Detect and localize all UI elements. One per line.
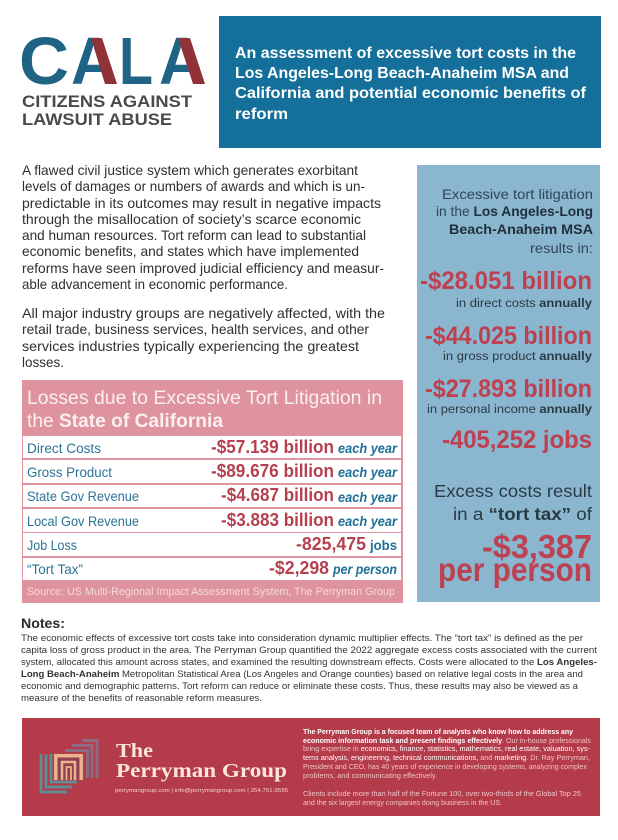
row: gross product [23, 460, 401, 483]
intro text block: reforms have seen improved judicial efficiency and measur- [22, 260, 384, 276]
table heading: the State of California [27, 411, 223, 432]
footer about text: Clients include more than half of the Fortune 100, over two-thirds of the Global Top 25 [303, 791, 581, 798]
footer about text: President and CEO, has 40 years of experience in developing systems, analyzing complex [303, 764, 587, 771]
logo: CALA: L [119, 24, 153, 99]
row: tort tax [23, 558, 401, 580]
stat: direct costs: in direct costs annually [456, 298, 593, 310]
row: tort tax: “Tort Tax” [27, 561, 83, 577]
stat: jobs: -405,252 jobs [442, 426, 592, 454]
panel intro: Excessive tort litigation [442, 186, 593, 202]
row: local gov revenue: -$3.883 billion [221, 510, 334, 530]
footer about text: bring expertise in economics, finance, statistics, mathematics, real estate, valuation, sys- [303, 746, 591, 753]
logo: CALA: A [159, 24, 204, 99]
tort tax callout: per person [438, 551, 592, 588]
intro text block: through the misallocation of society’s scarce economic [22, 211, 361, 227]
intro text block: levels of damages or numbers of awards and which is un- [22, 178, 365, 194]
title banner: An assessment of excessive tort costs in the [235, 45, 576, 62]
row: job loss: -825,475 [296, 534, 366, 554]
logo: CALA: CITIZENS AGAINST [22, 93, 192, 111]
tort tax callout: Excess costs result [434, 481, 592, 501]
panel: Perryman Group footer [22, 718, 600, 816]
footer about text [303, 729, 592, 807]
notes: The economic effects of excessive tort costs take into consideration dynamic multiplier effects. The “tort tax” is defined as the per [21, 633, 583, 643]
stat: direct costs [420, 267, 593, 310]
intro text block: losses. [22, 354, 64, 370]
logo: CALA [19, 24, 205, 129]
row: job loss: Job Loss [27, 537, 77, 553]
footer contact line: perrymangroup.com | info@perrymangroup.com | 254.751.9595 [115, 788, 288, 794]
row: gross product: -$89.676 billion [211, 461, 334, 481]
row: state gov revenue: -$4.687 billion [221, 485, 334, 505]
stat: personal income [425, 375, 593, 416]
intro text block: economic benefits, and states which have implemented [22, 243, 359, 259]
row: state gov revenue: each year [338, 489, 398, 505]
row: tort tax: -$2,298 [269, 558, 329, 578]
row: gross product: each year [338, 464, 398, 480]
row: local gov revenue: Local Gov Revenue [27, 513, 139, 529]
notes: Notes: [21, 615, 65, 631]
panel: Los Angeles MSA results [417, 165, 600, 602]
tort tax callout: in a “tort tax” of [453, 504, 592, 524]
panel intro: results in: [530, 240, 593, 256]
stat: gross product: -$44.025 billion [425, 322, 592, 350]
stat: gross product [425, 322, 593, 363]
footer about text: and the six largest energy companies doing business in the US. [303, 800, 502, 807]
tort tax callout [434, 481, 592, 588]
row: job loss: jobs [369, 537, 397, 553]
intro text block: predictable in its outcomes may result in negative impacts [22, 195, 381, 211]
tort tax callout: -$3,387 [482, 528, 592, 565]
row: direct costs: -$57.139 billion [211, 437, 334, 457]
row: direct costs: each year [338, 440, 398, 456]
logo: CALA: C [19, 24, 69, 99]
row: local gov revenue [23, 509, 401, 532]
intro text block: retail trade, business services, health services, and other [22, 321, 369, 337]
footer about text: tems analysis, engineering, technical communications, and marketing. Dr. Ray Perryman, [303, 755, 590, 762]
intro text block [22, 162, 385, 370]
title banner: reform [235, 106, 288, 123]
intro text block: able advancement in economic performance. [22, 276, 288, 292]
table heading [27, 388, 382, 432]
logo: CALA: A [71, 24, 116, 99]
notes: system, allocated this amount across states, and examined the resulting downstream effects. Costs were allocated to the Los Angeles- [21, 657, 597, 667]
stat: gross product: in gross product annually [443, 351, 593, 363]
table heading: Losses due to Excessive Tort Litigation in [27, 388, 382, 409]
panel intro: Beach-Anaheim MSA [449, 221, 593, 237]
panel intro: in the Los Angeles-Long [436, 203, 593, 219]
row: state gov revenue [23, 485, 401, 507]
row: tort tax: per person [332, 561, 397, 577]
row: local gov revenue: each year [338, 513, 398, 529]
stat: personal income: -$27.893 billion [425, 375, 592, 403]
notes: capita loss of gross product in the area. The Perryman Group quantified the 2022 aggregate excess costs associated with the current [21, 645, 598, 655]
row: state gov revenue: State Gov Revenue [27, 488, 139, 504]
footer brand name: The [116, 740, 153, 762]
stat: direct costs: -$28.051 billion [420, 267, 592, 295]
footer about text: problems, and communicating effectively. [303, 773, 437, 780]
row: gross product: Gross Product [27, 464, 112, 480]
logo: CALA: LAWSUIT ABUSE [22, 111, 172, 129]
table source: Source: US Multi-Regional Impact Assessment System, The Perryman Group [27, 586, 395, 598]
row: direct costs [23, 436, 401, 458]
notes: economic and demographic patterns. Tort reform can reduce or eliminate these costs. Thus, these results may also be viewed as a [21, 681, 578, 691]
intro text block: All major industry groups are negatively affected, with the [22, 305, 385, 321]
title banner [219, 16, 601, 148]
footer brand name [116, 740, 287, 782]
row: direct costs: Direct Costs [27, 440, 101, 456]
footer about text: The Perryman Group is a focused team of analysts who know how to address any [303, 729, 573, 736]
footer about text: economic information task and present findings effectively . Our in-house professionals [303, 738, 592, 745]
footer brand name: Perryman Group [116, 760, 287, 782]
notes: measure of the benefits of reasonable reform measures. [21, 693, 262, 703]
row: job loss [23, 533, 401, 556]
icon: Perryman Group logo [41, 740, 97, 792]
title banner: Los Angeles-Long Beach-Anaheim MSA and [235, 65, 569, 82]
title banner: California and potential economic benefits of [235, 85, 587, 102]
intro text block: A flawed civil justice system which generates exorbitant [22, 162, 358, 178]
stat: personal income: in personal income annually [427, 404, 593, 416]
notes: Long Beach-Anaheim Metropolitan Statistical Area (Los Angeles and Orange counties) based on relative legal costs in the area and [21, 669, 583, 679]
panel intro [436, 186, 593, 256]
intro text block: and human resources. Tort reform can lead to substantial [22, 227, 366, 243]
intro text block: services industries typically experiencing the greatest [22, 338, 359, 354]
panel: California losses table [22, 380, 403, 603]
notes [21, 615, 598, 703]
